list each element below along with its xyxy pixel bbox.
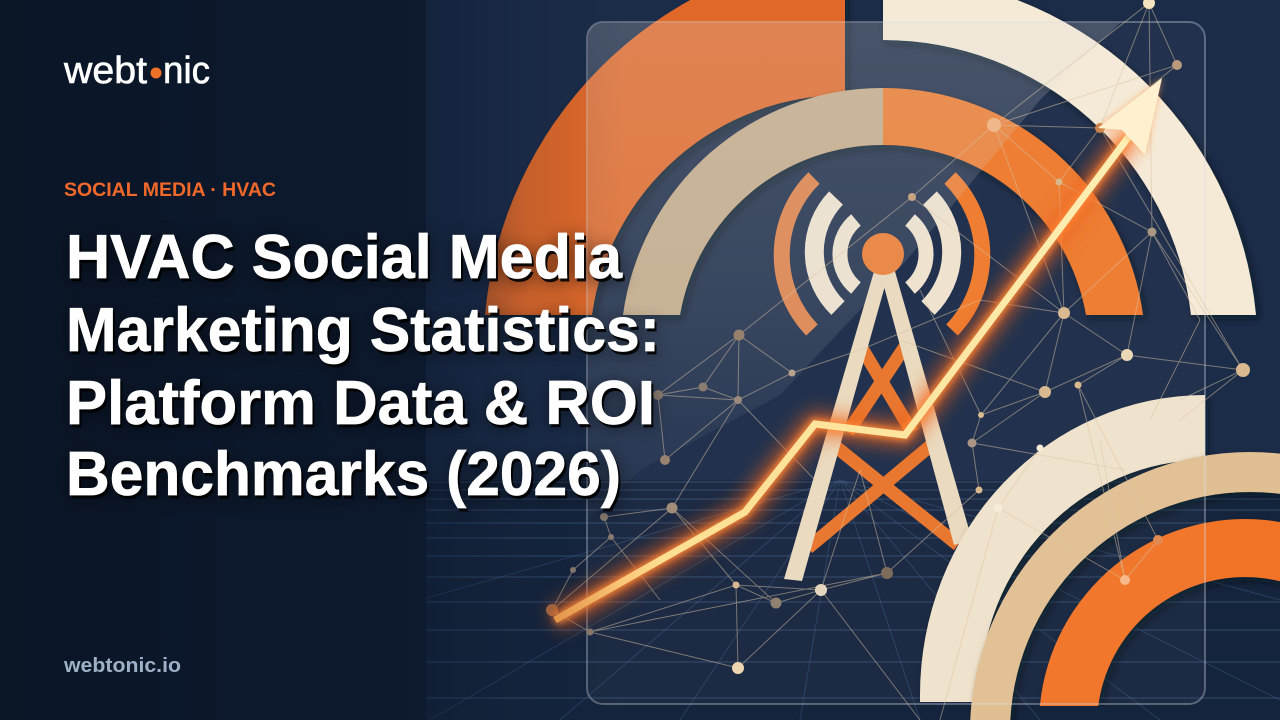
category label: SOCIAL MEDIA · HVAC bbox=[64, 180, 276, 201]
navy background bbox=[426, 0, 1280, 480]
network of connected nodes bbox=[546, 0, 1250, 720]
brand logo bbox=[63, 50, 210, 92]
glass panel bbox=[587, 22, 1205, 704]
title bbox=[66, 223, 662, 518]
lower right concentric arcs bbox=[920, 395, 1280, 720]
cream arc, top right bbox=[883, 0, 1256, 315]
hero illustration: broadcast tower with arcs and growth arrow bbox=[426, 0, 1280, 720]
title: Platform Data & ROI bbox=[66, 369, 655, 438]
dark fade behind headline bbox=[426, 0, 598, 720]
title: Benchmarks (2026) bbox=[66, 440, 621, 509]
broadcast tower bbox=[784, 233, 972, 581]
brand logo: nic bbox=[163, 50, 210, 92]
perspective floor grid bbox=[420, 480, 1280, 720]
signal waves bbox=[782, 178, 982, 330]
large orange arc, top left bbox=[485, 0, 845, 315]
brand logo: webt bbox=[63, 50, 147, 92]
title: HVAC Social Media bbox=[66, 223, 623, 292]
glowing growth arrow bbox=[555, 78, 1162, 620]
title: Marketing Statistics: bbox=[66, 296, 660, 365]
two-tone middle arc bbox=[623, 88, 1143, 315]
footer site address: webtonic.io bbox=[63, 655, 181, 677]
